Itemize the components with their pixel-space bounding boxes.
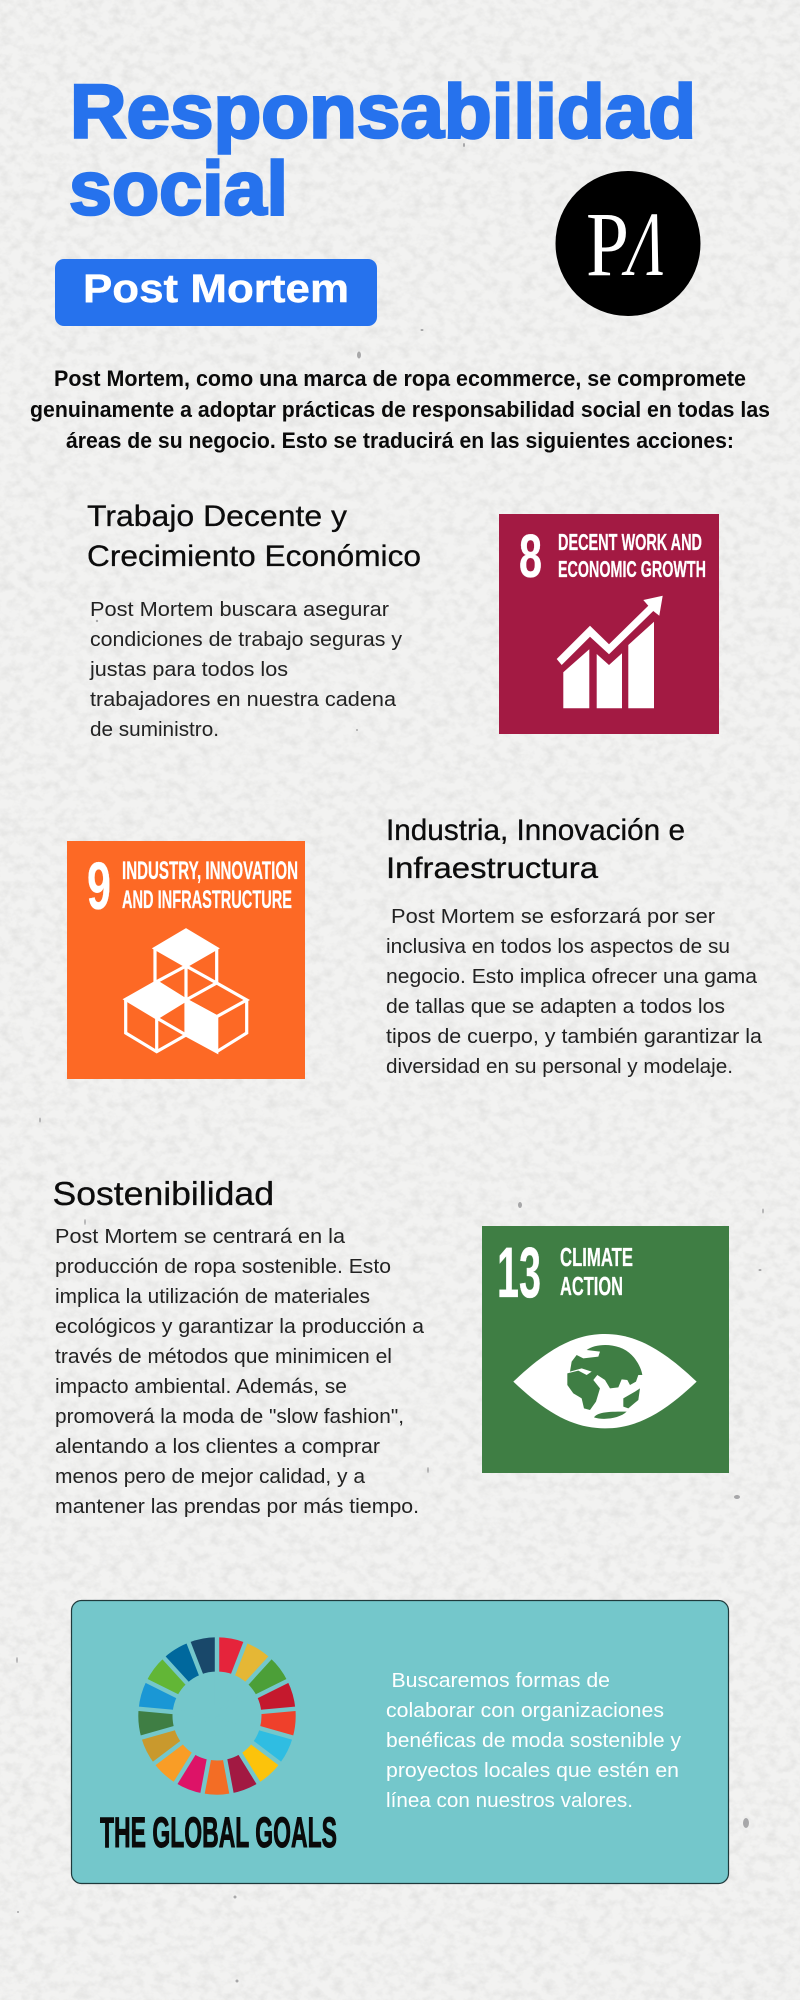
title: Responsabilidad bbox=[70, 70, 696, 154]
intro text: áreas de su negocio. Esto se traducirá en las siguientes acciones: bbox=[66, 428, 734, 453]
number 8: 8 bbox=[519, 522, 542, 590]
label: The Global Goals: THE GLOBAL GOALS bbox=[100, 1809, 337, 1857]
icon: PA logo: Λ bbox=[617, 194, 680, 296]
text block: collaboration: colaborar con organizaciones bbox=[386, 1699, 664, 1722]
text block: trabajo decente: condiciones de trabajo seguras y bbox=[90, 628, 403, 651]
number 13: 13 bbox=[497, 1234, 541, 1313]
heading: Trabajo Decente y Crecimiento Económico: Trabajo Decente y bbox=[87, 500, 347, 533]
intro text: genuinamente a adoptar prácticas de responsabilidad social en todas las bbox=[30, 397, 770, 422]
text block: industria bbox=[386, 905, 763, 1078]
intro text: Post Mortem, como una marca de ropa ecommerce, se compromete bbox=[54, 366, 746, 391]
text block: sostenibilidad: menos pero de mejor calidad, y a bbox=[55, 1465, 366, 1488]
icon: PA logo bbox=[556, 171, 700, 316]
text block: collaboration: línea con nuestros valores. bbox=[386, 1789, 633, 1812]
heading: Industria, Innovación e Infraestructura: Infraestructura bbox=[386, 852, 599, 885]
text block: industria: tipos de cuerpo, y también garantizar la bbox=[386, 1025, 763, 1048]
text block: sostenibilidad: Post Mortem se centrará en la bbox=[55, 1225, 346, 1248]
text block: trabajo decente: Post Mortem buscara asegurar bbox=[90, 598, 389, 621]
title bbox=[69, 70, 696, 232]
heading: Trabajo Decente y Crecimiento Económico bbox=[87, 500, 421, 573]
button: Post Mortem: Post Mortem bbox=[83, 267, 349, 311]
card title: INDUSTRY, INNOVATION bbox=[122, 857, 298, 885]
panel: SDG 9 card bbox=[67, 841, 305, 1079]
text block: industria: Post Mortem se esforzará por ser bbox=[391, 905, 715, 928]
text block: sostenibilidad: ecológicos y garantizar la producción a bbox=[55, 1315, 425, 1338]
icon: eye with globe bbox=[513, 1334, 697, 1428]
card title: ECONOMIC GROWTH bbox=[558, 556, 706, 582]
text block: collaboration: proyectos locales que estén en bbox=[386, 1759, 679, 1782]
heading: Industria, Innovación e Infraestructura bbox=[386, 814, 685, 885]
heading: Industria, Innovación e Infraestructura: Industria, Innovación e bbox=[386, 814, 685, 847]
card title: DECENT WORK AND bbox=[558, 529, 702, 555]
card title: ACTION bbox=[560, 1271, 623, 1301]
text block: collaboration: benéficas de moda sostenible y bbox=[386, 1729, 682, 1752]
number 9: 9 bbox=[87, 849, 111, 924]
title: social bbox=[69, 146, 288, 232]
text block: collaboration bbox=[386, 1669, 682, 1812]
card title: CLIMATE bbox=[560, 1242, 633, 1272]
button: Post Mortem bbox=[55, 259, 377, 326]
icon: PA logo: P bbox=[586, 193, 629, 295]
card title: AND INFRASTRUCTURE bbox=[122, 886, 292, 914]
text block: industria: negocio. Esto implica ofrecer una gama bbox=[386, 965, 758, 988]
text block: industria: de tallas que se adapten a todos los bbox=[386, 995, 725, 1018]
card title bbox=[122, 857, 298, 914]
intro text bbox=[30, 366, 770, 453]
card title bbox=[560, 1242, 633, 1301]
text block: industria: diversidad en su personal y modelaje. bbox=[386, 1055, 733, 1078]
text block: collaboration: Buscaremos formas de bbox=[392, 1669, 610, 1692]
panel: global goals bbox=[72, 1600, 728, 1884]
panel: SDG 8 card bbox=[499, 514, 719, 734]
heading: Sostenibilidad: Sostenibilidad bbox=[52, 1175, 274, 1212]
text block: sostenibilidad: implica la utilización de materiales bbox=[55, 1285, 370, 1308]
text block: sostenibilidad: impacto ambiental. Además, se bbox=[55, 1375, 347, 1398]
text block: industria: inclusiva en todos los aspectos de su bbox=[386, 935, 730, 958]
text block: sostenibilidad: través de métodos que minimicen el bbox=[55, 1345, 392, 1368]
text block: sostenibilidad: alentando a los clientes a comprar bbox=[55, 1435, 380, 1458]
text block: trabajo decente bbox=[89, 598, 403, 741]
text block: sostenibilidad bbox=[55, 1225, 425, 1518]
text block: trabajo decente: justas para todos los bbox=[89, 658, 288, 681]
text block: trabajo decente: trabajadores en nuestra cadena bbox=[90, 688, 397, 711]
text block: trabajo decente: de suministro. bbox=[90, 718, 219, 741]
icon: cubes bbox=[126, 930, 247, 1052]
panel: SDG 13 card bbox=[482, 1226, 729, 1473]
text block: sostenibilidad: promoverá la moda de "slow fashion", bbox=[55, 1405, 404, 1428]
icon: SDG colour wheel bbox=[133, 1632, 301, 1799]
heading: Trabajo Decente y Crecimiento Económico: Crecimiento Económico bbox=[87, 540, 421, 573]
card title bbox=[558, 529, 706, 582]
text block: sostenibilidad: producción de ropa sostenible. Esto bbox=[55, 1255, 391, 1278]
icon: growth chart bbox=[557, 596, 663, 708]
text block: sostenibilidad: mantener las prendas por más tiempo. bbox=[55, 1495, 419, 1518]
